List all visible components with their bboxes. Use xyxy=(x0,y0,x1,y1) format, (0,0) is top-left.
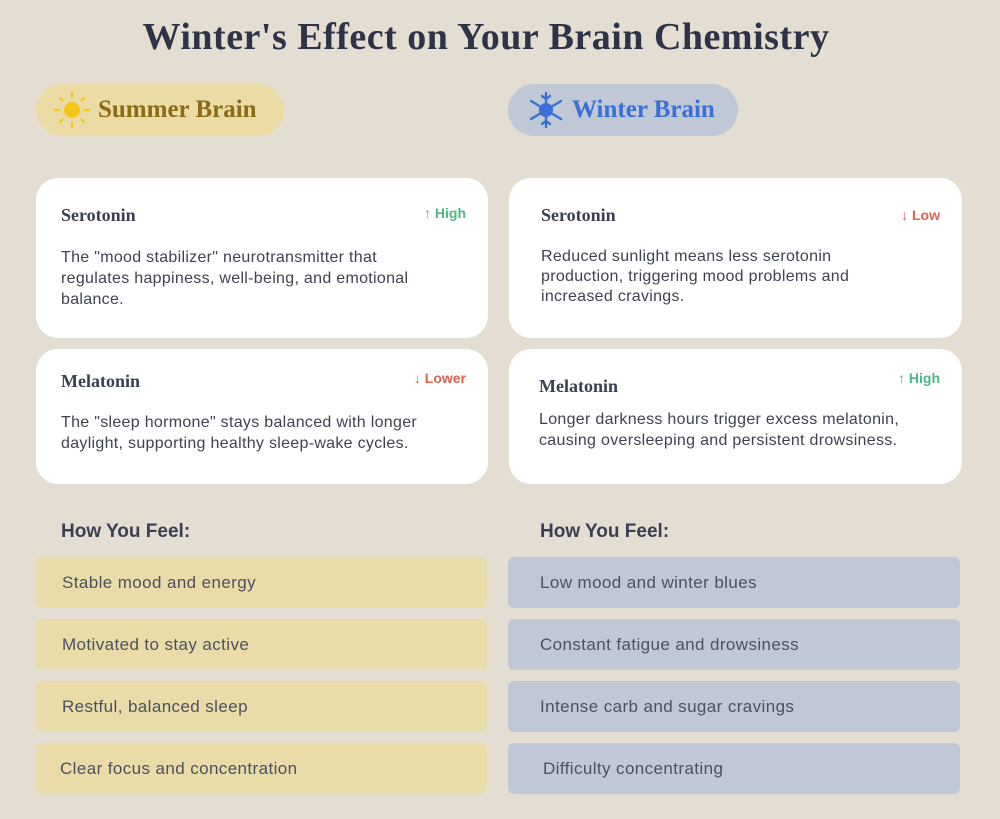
card: summer serotonin: The "mood stabilizer" neurotransmitter that xyxy=(61,249,377,266)
card: winter melatonin: Melatonin xyxy=(539,376,618,396)
summer feelings list xyxy=(36,557,487,794)
card: winter serotonin xyxy=(509,178,962,338)
card: winter serotonin: ↓ Low xyxy=(901,207,940,223)
card: winter serotonin: Reduced sunlight means less serotonin xyxy=(541,248,831,265)
icon: snowflake xyxy=(530,92,562,128)
card: summer serotonin: ↑ High xyxy=(424,205,466,221)
summer feelings list: Restful, balanced sleep xyxy=(62,696,248,716)
pill: winter brain xyxy=(508,84,738,136)
card: summer melatonin: ↓ Lower xyxy=(414,370,466,386)
card: summer serotonin: regulates happiness, well-being, and emotional xyxy=(61,270,408,287)
pill: summer brain xyxy=(36,84,284,136)
card: summer melatonin: Melatonin xyxy=(61,371,140,391)
card: summer serotonin: Serotonin xyxy=(61,205,136,225)
winter feelings list xyxy=(508,557,960,794)
card: summer melatonin: The "sleep hormone" stays balanced with longer xyxy=(61,414,417,431)
card: winter melatonin xyxy=(509,349,962,484)
winter feelings list: Constant fatigue and drowsiness xyxy=(540,634,799,654)
title: Winter's Effect on Your Brain Chemistry xyxy=(143,16,829,58)
summer feelings list: Stable mood and energy xyxy=(62,572,256,592)
card: winter serotonin: Serotonin xyxy=(541,205,616,225)
card: summer serotonin: balance. xyxy=(61,291,124,308)
card: winter melatonin: Longer darkness hours trigger excess melatonin, xyxy=(539,411,899,428)
card: summer serotonin xyxy=(36,178,488,338)
card: winter serotonin: increased cravings. xyxy=(541,288,685,305)
card: winter melatonin: causing oversleeping and persistent drowsiness. xyxy=(539,432,897,449)
winter feelings list: Intense carb and sugar cravings xyxy=(540,696,794,716)
summer feelings list: Motivated to stay active xyxy=(62,634,249,654)
icon: sun xyxy=(54,92,90,128)
summer feelings list: Clear focus and concentration xyxy=(60,758,297,778)
heading: winter how you feel: How You Feel: xyxy=(540,521,669,542)
winter feelings list: Low mood and winter blues xyxy=(540,572,757,592)
card: summer melatonin xyxy=(36,349,488,484)
card: winter serotonin: production, triggering mood problems and xyxy=(541,268,849,285)
card: summer melatonin: daylight, supporting healthy sleep-wake cycles. xyxy=(61,435,409,452)
card: winter melatonin: ↑ High xyxy=(898,370,940,386)
pill: winter brain: Winter Brain xyxy=(572,96,715,123)
heading: summer how you feel: How You Feel: xyxy=(61,521,190,542)
pill: summer brain: Summer Brain xyxy=(98,96,257,123)
winter feelings list: Difficulty concentrating xyxy=(543,758,723,778)
